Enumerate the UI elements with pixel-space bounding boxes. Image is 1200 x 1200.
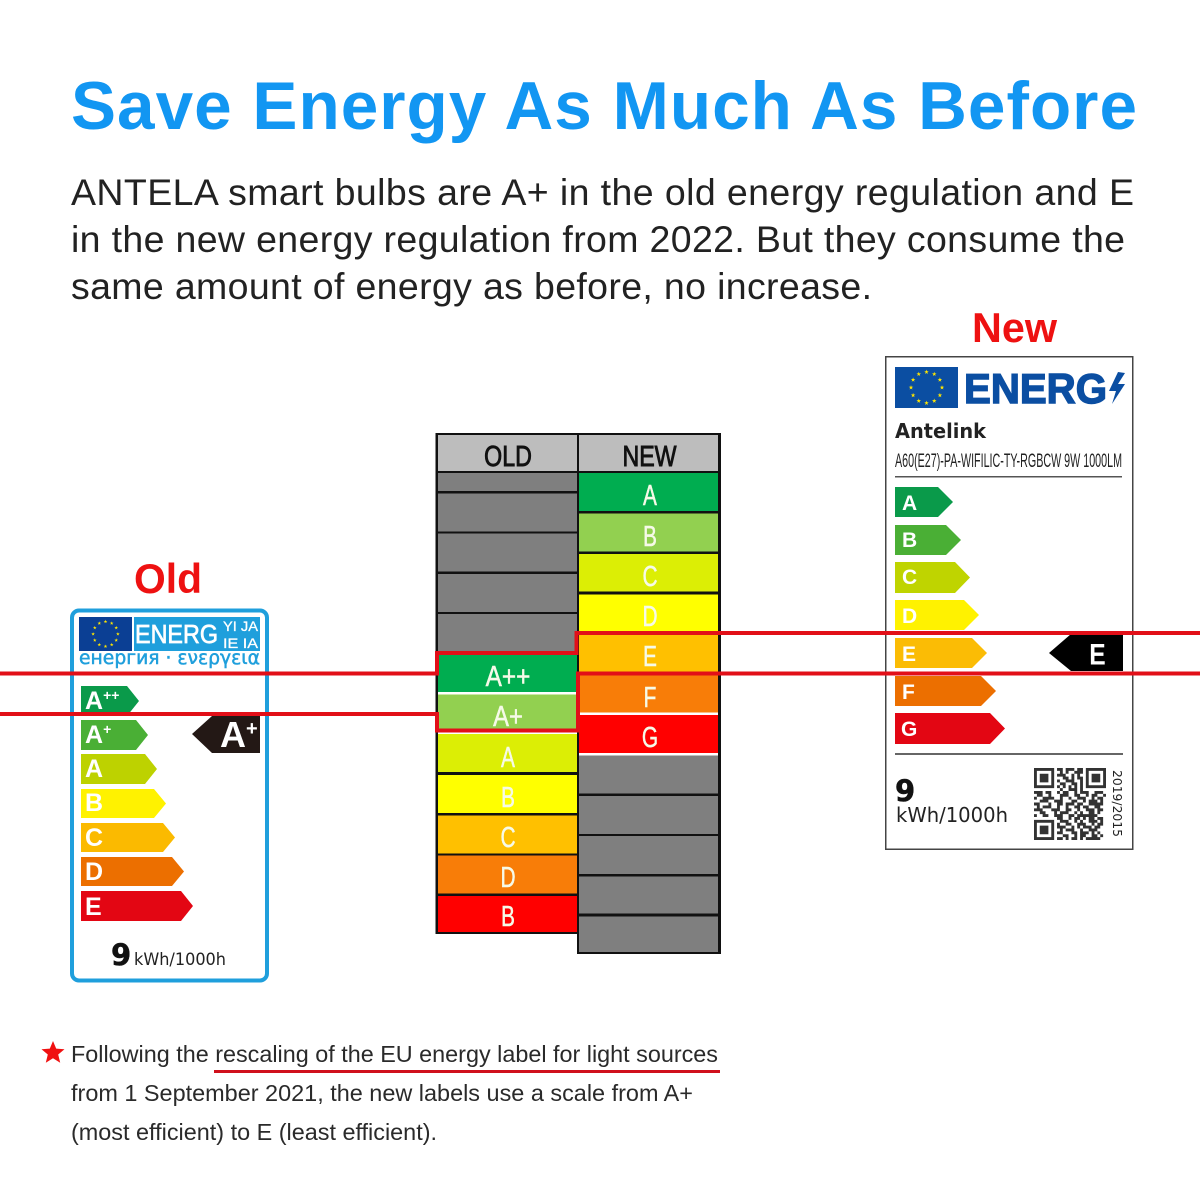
energy consumption <box>895 774 1008 827</box>
new column scale: B <box>643 521 657 553</box>
footnote text: (most efficient) to E (least efficient). <box>71 1119 437 1145</box>
column header: OLD: OLD <box>484 439 532 473</box>
energy scale A++ to E <box>78 686 193 921</box>
QR code <box>1034 768 1106 840</box>
column header: OLD <box>438 435 577 473</box>
heading: Old: Old <box>134 555 202 602</box>
energy scale A to G: A <box>902 492 917 515</box>
old column scale: C <box>500 822 516 854</box>
energy scale A++ to E: ++ <box>103 687 119 703</box>
panel: new energy label <box>886 357 1133 849</box>
energy scale A++ to E: A <box>85 755 103 783</box>
new column scale: G <box>642 722 658 754</box>
energy scale A to G <box>895 487 1005 744</box>
intro text block <box>71 171 1134 307</box>
footnote text: Following the rescaling of the EU energy label for light sources <box>71 1041 718 1067</box>
new column scale: D <box>642 601 658 633</box>
icon: EU flag <box>895 367 958 408</box>
title: Save Energy As Much As Before <box>71 69 1137 144</box>
ENERG logo: ENERG <box>964 365 1107 412</box>
energy scale A++ to E: A <box>85 687 103 715</box>
energy scale A to G: F <box>902 681 915 704</box>
ENERGY logo: ENERG <box>135 619 218 649</box>
energy consumption <box>111 938 226 972</box>
new column scale: F <box>644 682 656 714</box>
new column scale <box>579 473 718 952</box>
intro text block: ANTELA smart bulbs are A+ in the old energy regulation and E <box>71 171 1134 213</box>
icon: EU flag <box>79 617 132 651</box>
old column scale: D <box>500 862 516 894</box>
energy wordmark: енергия · ενεργεια <box>79 647 260 669</box>
energy scale A to G: B <box>902 529 917 552</box>
rating tag: A+: + <box>246 718 258 740</box>
ENERGY logo <box>134 617 260 651</box>
old column scale: A+ <box>493 700 523 733</box>
energy scale A to G: G <box>901 718 917 741</box>
intro text block: same amount of energy as before, no increase. <box>71 265 872 307</box>
energy consumption: 9 <box>895 774 915 808</box>
new column scale: C <box>642 561 658 593</box>
red guide line: upper boundary <box>0 633 1200 674</box>
column header: NEW: NEW <box>622 439 677 473</box>
regulation number: 2019/2015 <box>1110 770 1125 837</box>
ENERGY logo: YI JA <box>223 618 259 634</box>
red guide line: lower boundary <box>0 674 1200 730</box>
footnote text <box>71 1041 718 1145</box>
new column scale: A <box>643 480 657 512</box>
footnote text: from 1 September 2021, the new labels use a scale from A+ <box>71 1080 693 1106</box>
energy scale A to G: D <box>902 605 917 628</box>
energy scale A to G: C <box>902 566 917 589</box>
heading: New: New <box>972 304 1057 351</box>
panel: old energy label <box>72 610 267 980</box>
old column scale: B <box>501 901 515 933</box>
energy consumption: 9 <box>111 938 131 972</box>
rating tag: A+ <box>192 714 260 755</box>
energy scale A++ to E: A <box>85 721 103 749</box>
energy scale A to G: E <box>902 643 916 666</box>
ENERGY logo: IE IA <box>223 635 259 651</box>
energy consumption: kWh/1000h <box>896 803 1008 827</box>
rating tag: A+: A <box>220 714 246 755</box>
energy scale A++ to E: + <box>103 721 111 737</box>
supplier name: Antelink <box>895 419 987 443</box>
energy scale A++ to E: E <box>85 893 102 921</box>
old column scale: A++ <box>486 660 530 692</box>
old column scale: A <box>501 742 515 774</box>
energy scale A++ to E: C <box>85 824 103 852</box>
icon: red star <box>42 1041 64 1063</box>
column header: NEW <box>579 435 718 473</box>
new column scale: E <box>643 641 657 673</box>
intro text block: in the new energy regulation from 2022. But they consume the <box>71 218 1125 260</box>
energy scale A++ to E: D <box>85 858 103 886</box>
rating tag: E: E <box>1089 637 1106 671</box>
footnote underline <box>214 1070 720 1073</box>
old column scale <box>438 473 577 933</box>
panel: old to new comparison table <box>436 433 721 954</box>
old column scale: B <box>501 782 515 814</box>
rating tag: E <box>1049 634 1123 671</box>
energy scale A++ to E: B <box>85 789 103 817</box>
energy consumption: kWh/1000h <box>134 950 226 969</box>
